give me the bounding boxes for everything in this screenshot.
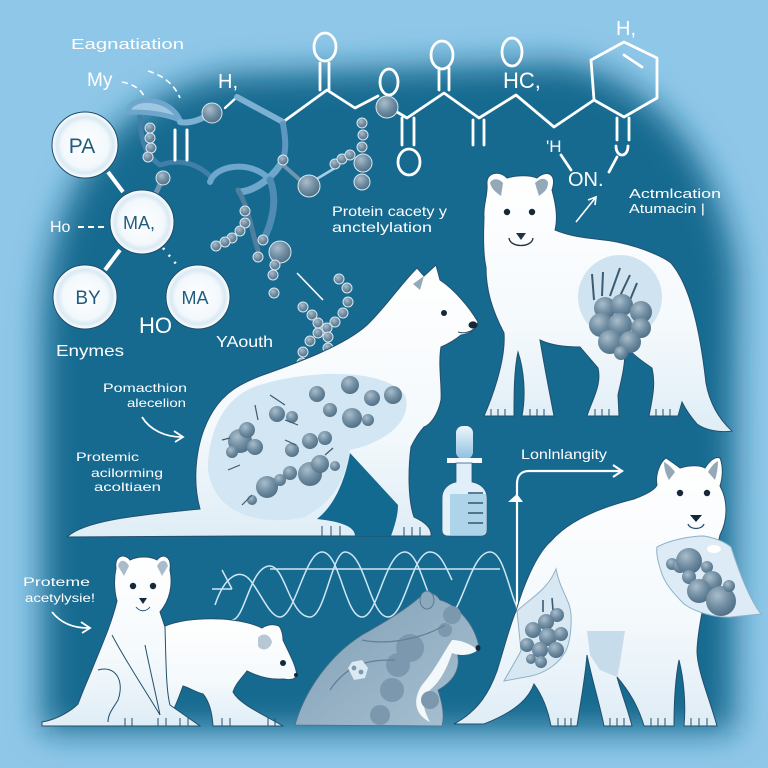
longevity label: Lonlnlangity [521,446,607,462]
label: proteme acetylysie [23,575,95,605]
dark central backdrop [42,62,736,732]
top right standing animal [484,173,732,432]
arrow to centre animal [142,417,183,442]
label: protein acetylation [332,203,447,235]
organ cluster [589,294,652,360]
DNA waves [212,552,520,620]
organ spheres [226,376,402,505]
left labels middle: Protemic [76,450,139,464]
bead strings [143,96,398,373]
organ sac left [504,569,571,681]
small labels top left: Eagnatiation [71,36,184,53]
longevity arrow [517,465,622,611]
molecule atom labels: 'H [546,137,562,156]
centre sitting animal [67,265,478,537]
label: activation: Actmlcation [629,186,721,201]
enzyme connectors [78,71,323,300]
molecule atom labels: H, [218,71,238,93]
bottom right bear [454,457,761,726]
left labels middle [76,381,187,494]
small labels top left: My [87,70,113,91]
left labels middle: alecelion [127,396,186,410]
small labels top left [50,36,273,360]
label: protein acetylation: Protein cacety y [332,203,447,219]
bottom grey curled animal [295,591,480,726]
belly panel [208,374,407,520]
enzyme circle: BY [53,265,117,329]
enzyme circle: MA lower [166,265,230,329]
label: proteme acetylysie: Proteme [23,575,90,589]
label: activation: Atumacin | [629,201,705,216]
organ sac right [657,536,761,617]
arrow to top animal [576,197,596,222]
molecular structure chain [225,33,657,175]
paw toes [322,526,420,536]
protein ribbon and beads [128,96,398,373]
belly shade [587,631,625,677]
arrow to ferret [52,612,90,633]
bottom left ferret [42,556,275,726]
molecule atom labels: ON. [568,169,604,191]
leg gap [317,453,398,536]
bottom left second animal [150,619,298,726]
left labels middle: acoltiaen [94,480,161,494]
left labels middle: acilorming [91,466,163,480]
label: proteme acetylysie: acetylysie! [25,591,95,605]
enzyme circle: MA lower: MA [182,288,208,308]
small labels top left: Ho [50,219,71,236]
small labels top left: YAouth [216,334,273,351]
left labels middle: Pomacthion [103,381,187,395]
enzyme circle: MA [110,190,174,254]
small labels top left: HO [139,313,172,338]
enzyme circle: BY: BY [75,288,101,309]
white muzzle and chest [416,640,478,722]
arrow head on vertical [508,494,523,502]
organ halo [578,255,662,339]
molecule atom labels: H, [616,18,636,40]
enzyme circle: PA [52,112,118,178]
molecule atom labels [218,18,636,191]
small labels top left: Enymes [56,343,124,360]
label: activation [629,186,721,216]
enzyme circle: PA: PA [69,135,95,158]
enzyme circle: MA: MA, [123,213,155,233]
paw toes [491,409,670,416]
vial [442,426,487,536]
label: protein acetylation: anctelylation [332,219,432,235]
paw toes [558,718,707,726]
molecule atom labels: HC, [503,68,541,93]
